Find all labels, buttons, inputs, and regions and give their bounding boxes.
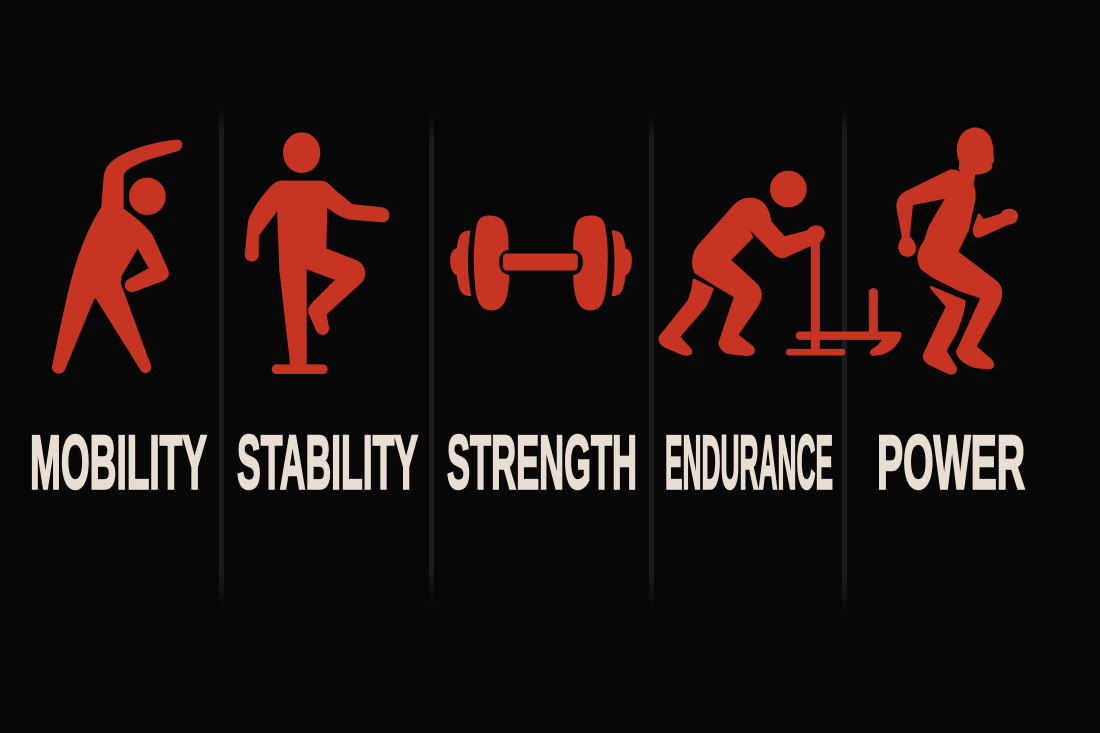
text: STRENGTH xyxy=(447,420,637,506)
text: STABILITY xyxy=(237,420,418,506)
icon: power explosive jump figure xyxy=(898,129,1017,373)
icon: dumbbell xyxy=(451,216,631,310)
icon: endurance sled-push figure xyxy=(660,172,823,355)
icon: stability one-leg balance figure xyxy=(246,134,388,373)
text: MOBILITY xyxy=(30,420,207,506)
icon: weighted sled xyxy=(787,241,901,355)
icon: mobility side-bend figure xyxy=(53,141,181,372)
